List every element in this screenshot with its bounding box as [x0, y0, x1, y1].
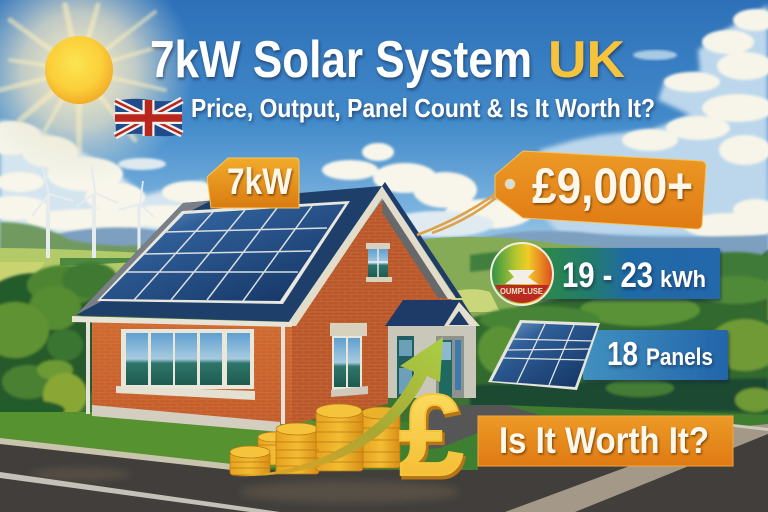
lawn — [0, 405, 768, 440]
gable trim — [286, 186, 456, 326]
pound symbol: £ — [399, 370, 464, 500]
title accent: UK: UK — [548, 31, 625, 89]
output banner: kWh — [660, 266, 706, 292]
porch — [385, 300, 480, 398]
sky background — [0, 0, 768, 270]
UK flag — [115, 99, 182, 136]
trees: right — [470, 250, 768, 420]
output banner — [491, 243, 720, 305]
growth arrow — [232, 337, 443, 476]
trees: left — [0, 262, 118, 420]
gutter pipes — [88, 322, 283, 424]
sun with rays — [0, 0, 194, 185]
side wall — [92, 322, 292, 424]
panels banner — [488, 320, 728, 390]
distant hills and fields — [0, 222, 768, 480]
7kW badge: 7kW — [227, 161, 292, 202]
7kW badge — [207, 158, 299, 208]
wind turbines — [32, 165, 155, 258]
lower window — [330, 323, 368, 397]
roof main — [76, 186, 382, 322]
front lawn — [0, 412, 420, 470]
price tag string — [417, 183, 510, 235]
worth it banner: Is It Worth It? — [499, 420, 709, 461]
driveway — [418, 405, 540, 450]
gable wall — [292, 200, 452, 424]
plinth — [92, 405, 280, 432]
solar array on roof — [97, 201, 350, 304]
house — [72, 182, 480, 432]
panels banner: Panels — [646, 344, 713, 371]
upper window — [366, 243, 392, 282]
road — [0, 420, 768, 512]
coin stacks — [230, 404, 401, 475]
title: 7kW Solar System — [150, 31, 532, 89]
brick texture — [92, 200, 452, 424]
gauge icon — [491, 243, 553, 305]
price tag: £9,000+ — [532, 158, 693, 214]
pound symbol: £ — [401, 373, 466, 503]
solar panel icon — [488, 320, 600, 390]
gauge icon: OUMPLUSE — [500, 287, 544, 296]
output banner: 19 - 23 — [562, 256, 653, 295]
large window — [116, 329, 255, 400]
price tag — [495, 151, 706, 229]
outer roof edge — [382, 182, 462, 298]
eave fascia — [72, 316, 292, 327]
clouds — [0, 5, 768, 240]
subtitle: Price, Output, Panel Count & Is It Worth It? — [191, 93, 655, 123]
panels banner: 18 — [607, 335, 638, 372]
lawn by driveway — [398, 428, 482, 470]
gable soffit — [382, 198, 448, 298]
